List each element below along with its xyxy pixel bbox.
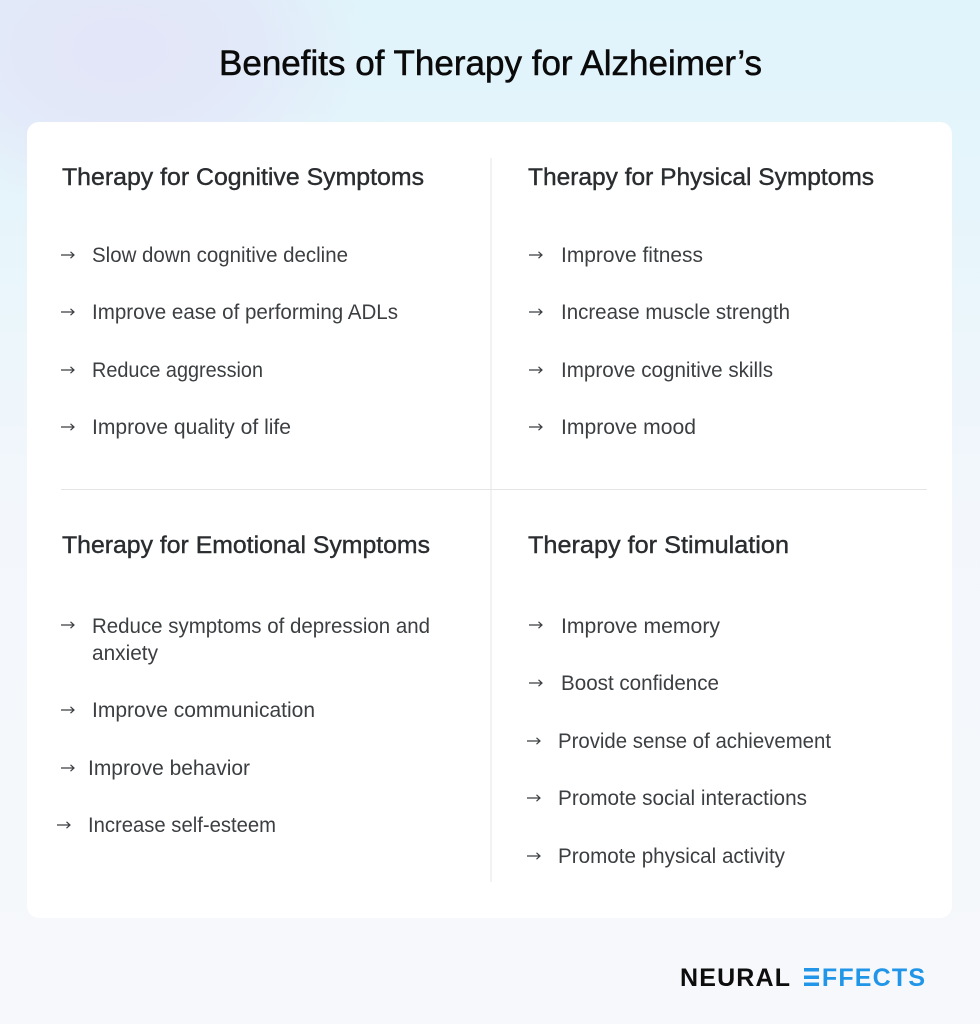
list item: improve quality of life: Improve quality of life bbox=[92, 416, 291, 439]
list item: reduce aggression: Reduce aggression bbox=[92, 359, 263, 382]
heading: cognitive symptoms: Therapy for Cognitive Symptoms bbox=[62, 164, 424, 191]
list item: improve communication: Improve communication bbox=[92, 699, 315, 722]
list item: improve memory: Improve memory bbox=[561, 615, 721, 638]
list item: improve cognitive skills: Improve cognitive skills bbox=[561, 359, 773, 382]
logo: neural effects: NEURAL bbox=[680, 964, 790, 992]
list item: promote physical activity: Promote physical activity bbox=[558, 845, 785, 868]
panel: therapy for physical symptoms bbox=[528, 164, 874, 439]
heading: stimulation: Therapy for Stimulation bbox=[528, 532, 789, 559]
panel: therapy for emotional symptoms bbox=[57, 532, 430, 837]
heading: emotional symptoms: Therapy for Emotional Symptoms bbox=[62, 532, 430, 559]
title: Benefits of Therapy for Alzheimer’s bbox=[219, 44, 762, 83]
list item: increase self-esteem: Increase self-esteem bbox=[88, 814, 276, 837]
list item: boost confidence: Boost confidence bbox=[561, 672, 719, 695]
list item: reduce symptoms of depression and anxiety bbox=[61, 615, 430, 665]
panel: white card bbox=[27, 122, 952, 918]
list item: reduce symptoms of depression and anxiety: anxiety bbox=[92, 642, 158, 665]
list item: slow down cognitive decline: Slow down cognitive decline bbox=[92, 244, 348, 267]
panel: therapy for stimulation bbox=[527, 532, 831, 868]
list item: improve behavior: Improve behavior bbox=[88, 757, 250, 780]
list item: improve mood: Improve mood bbox=[561, 416, 696, 439]
list item: promote social interactions: Promote social interactions bbox=[558, 787, 807, 810]
logo: neural effects bbox=[680, 964, 925, 992]
list item: improve fitness: Improve fitness bbox=[561, 244, 703, 267]
list item: reduce symptoms of depression and anxiety: Reduce symptoms of depression and bbox=[92, 615, 430, 638]
list item: improve ease of performing ADLs: Improve ease of performing ADLs bbox=[92, 301, 398, 324]
list item: increase muscle strength: Increase muscle strength bbox=[561, 301, 790, 324]
panel: therapy for cognitive symptoms bbox=[61, 164, 424, 439]
heading: physical symptoms: Therapy for Physical Symptoms bbox=[528, 164, 874, 191]
list item: provide sense of achievement: Provide sense of achievement bbox=[558, 730, 831, 753]
